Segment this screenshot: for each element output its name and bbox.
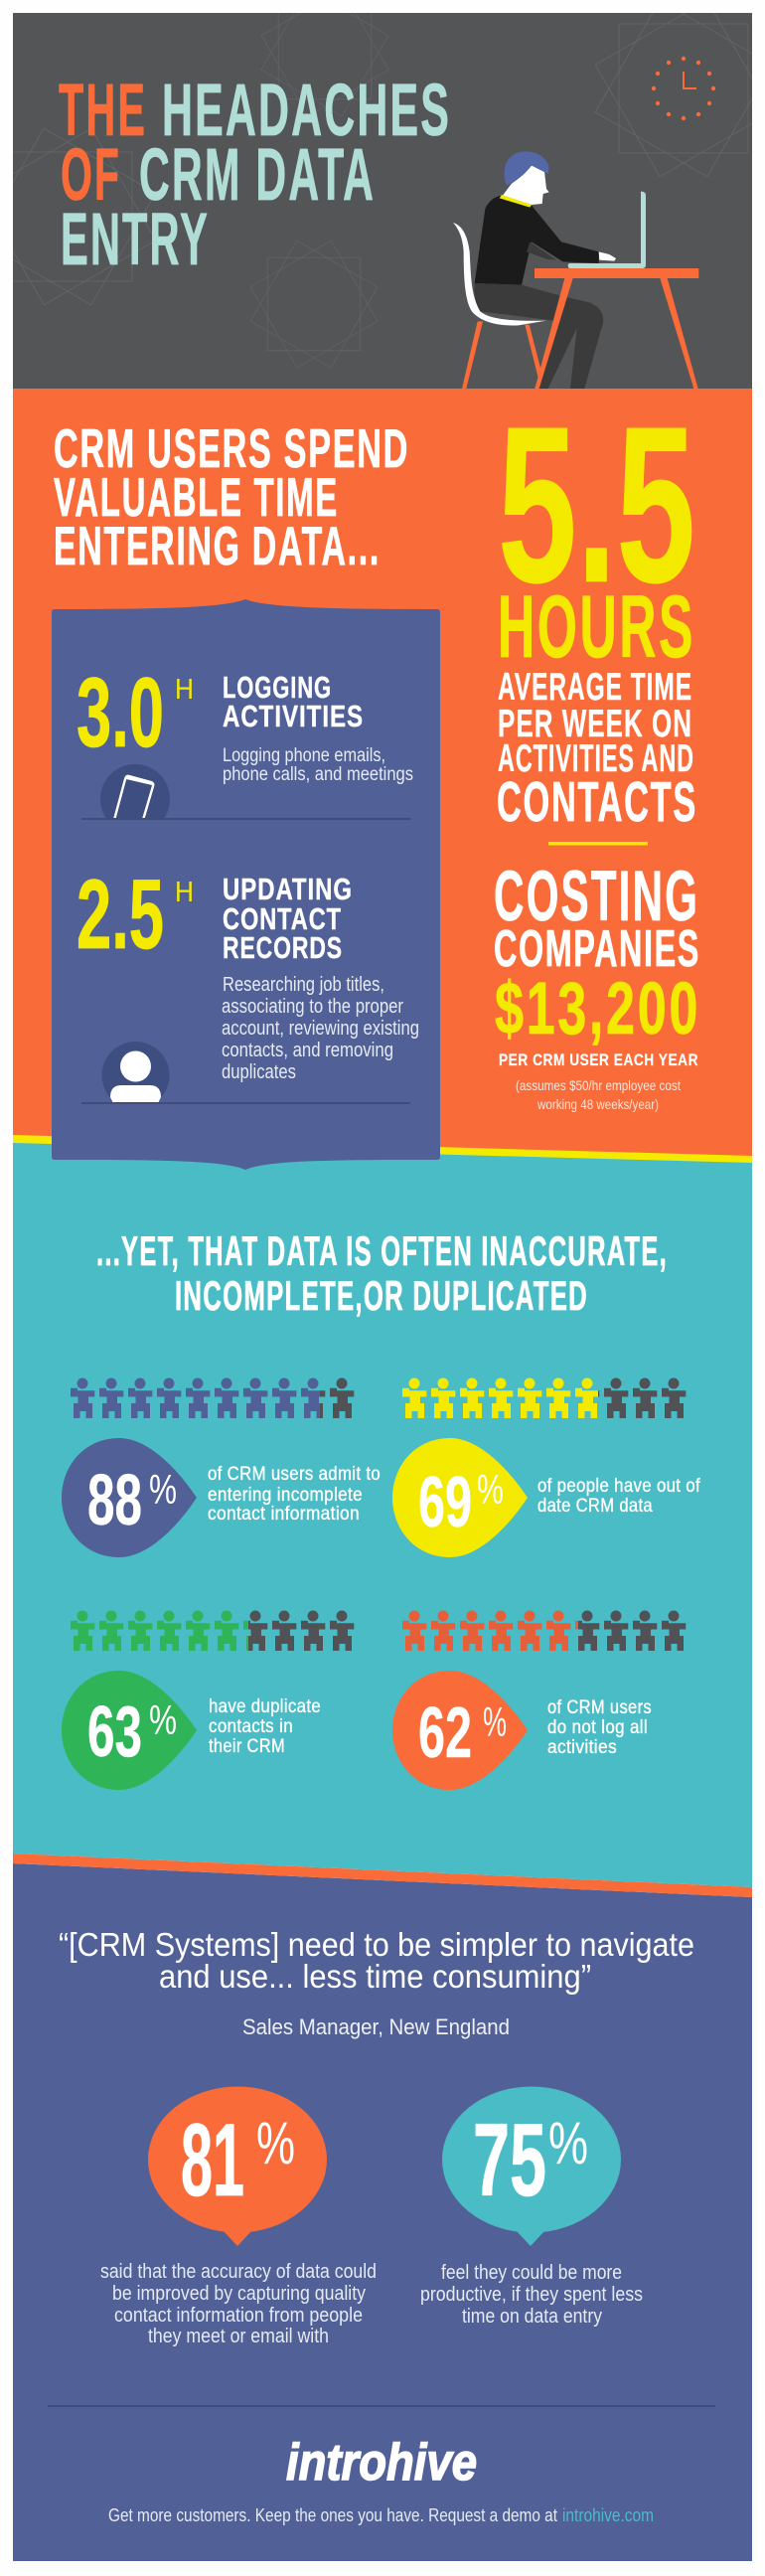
stat: 62 percent: of CRM users [547, 1697, 652, 1718]
stat: 69 percent: date CRM data [537, 1496, 653, 1517]
icon: contact person [101, 1042, 169, 1102]
title: THE [59, 69, 147, 151]
stat: 69 percent: % [477, 1466, 504, 1513]
stat: 63 percent: 63 [87, 1692, 142, 1772]
stat: 63 percent [62, 1610, 354, 1790]
heading: logging activities [223, 670, 364, 733]
stat: costing companies $13,200 [494, 858, 700, 1069]
stat: 62 percent: activities [547, 1737, 617, 1758]
text: updating description: associating to the proper [222, 996, 403, 1018]
heading: updating contact records [223, 872, 353, 965]
callout: 81 percent: % [256, 2110, 295, 2176]
callout: 81 percent: contact information from people [114, 2305, 363, 2327]
heading: CRM users spend valuable time: ENTERING DATA... [54, 515, 381, 576]
panel: quote and closing section [13, 1853, 752, 2561]
icon: clock [652, 57, 715, 120]
stat: 63 percent: % [149, 1696, 177, 1743]
stat: 62 percent: 62 [418, 1693, 472, 1773]
title: HEADACHES [162, 69, 451, 151]
panel: teal section [13, 1143, 752, 1887]
footnote: (assumes $50/hr employee cost [516, 1077, 681, 1093]
footnote: working 48 weeks/year) [536, 1096, 659, 1112]
heading: yet that data is often inaccurate [96, 1227, 668, 1319]
footer call to action: Get more customers. Keep the ones you have. Request a demo at [108, 2505, 557, 2525]
text: updating description: account, reviewing existing [222, 1018, 419, 1040]
stat: 3.0 hours: 3.0 [76, 657, 164, 767]
text: logging description [223, 745, 413, 785]
stat: 69 percent: 69 [418, 1463, 472, 1542]
title [59, 69, 451, 280]
text: logging description: Logging phone emails, [223, 745, 385, 766]
stat: 88 percent [62, 1377, 381, 1557]
callout: 75 percent: feel they could be more [441, 2262, 622, 2284]
illustration: person at laptop on desk [453, 151, 698, 389]
title: CRM DATA [139, 133, 376, 216]
stat: 63 percent: have duplicate [209, 1696, 321, 1717]
logo: introhive: introhive [286, 2434, 477, 2492]
heading: CRM users spend valuable time [54, 417, 409, 576]
callout: 81 percent: 81 [181, 2103, 244, 2218]
stat: 62 percent [392, 1610, 686, 1790]
callout: 81 percent [100, 2087, 377, 2347]
footnote [516, 1077, 681, 1112]
title: ENTRY [61, 198, 210, 280]
stat: 62 percent: % [483, 1698, 507, 1745]
stat: 69 percent: of people have out of [537, 1476, 700, 1497]
callout: 75 percent: time on data entry [462, 2306, 602, 2328]
stat: costing companies $13,200: PER CRM USER EACH YEAR [499, 1050, 698, 1069]
panel: blue activities card [52, 599, 440, 1170]
quote attribution: Sales Manager, New England [242, 2014, 510, 2039]
stat: 88 percent: 88 [87, 1461, 142, 1540]
panel: header [0, 0, 765, 389]
stat: 2.5 hours: 2.5 [76, 859, 164, 969]
heading: updating contact records: UPDATING [223, 872, 353, 906]
stat: 3.0 hours: H [175, 674, 194, 706]
heading: logging activities: LOGGING [223, 670, 332, 705]
heading: logging activities: ACTIVITIES [223, 699, 364, 733]
text: updating description [222, 974, 419, 1083]
quote: and use... less time consuming” [159, 1958, 591, 1995]
stat: 63 percent: contacts in [209, 1716, 293, 1737]
stat: 69 percent [392, 1377, 700, 1557]
callout: 81 percent: be improved by capturing quality [112, 2283, 366, 2305]
heading: CRM users spend valuable time: VALUABLE TIME [54, 466, 339, 528]
stat: 88 percent: contact information [208, 1504, 360, 1525]
callout: 81 percent: said that the accuracy of data could [100, 2261, 377, 2283]
footer call to action: introhive.com [562, 2505, 654, 2525]
stat: 62 percent: do not log all [547, 1717, 648, 1738]
callout: 75 percent [420, 2087, 643, 2328]
icon: phone [100, 764, 170, 818]
callout: 75 percent: 75 [473, 2103, 546, 2218]
stat: 5.5 hours [498, 381, 695, 676]
callout: 75 percent: productive, if they spent less [420, 2284, 643, 2306]
panel: time spent section [13, 381, 752, 1164]
heading: updating contact records: CONTACT [223, 901, 342, 936]
stat: 88 percent: % [149, 1466, 177, 1513]
title: OF [61, 133, 121, 216]
stat: 63 percent: their CRM [209, 1736, 285, 1757]
quote [59, 1926, 694, 1995]
callout: 75 percent: % [548, 2110, 588, 2176]
text: average time per week [497, 666, 697, 834]
text: updating description: contacts, and removing [222, 1040, 393, 1061]
heading: CRM users spend valuable time: CRM USERS SPEND [54, 417, 409, 479]
callout: 81 percent: they meet or email with [148, 2326, 329, 2347]
stat: 88 percent: of CRM users admit to [208, 1464, 381, 1485]
text: updating description: duplicates [222, 1061, 296, 1083]
quote: “[CRM Systems] need to be simpler to navigate [59, 1926, 694, 1963]
stat: 2.5 hours: H [175, 877, 194, 908]
text: updating description: Researching job titles, [223, 974, 384, 996]
stat: 88 percent: entering incomplete [208, 1485, 363, 1506]
text: logging description: phone calls, and meetings [223, 764, 413, 785]
heading: updating contact records: RECORDS [223, 930, 343, 965]
